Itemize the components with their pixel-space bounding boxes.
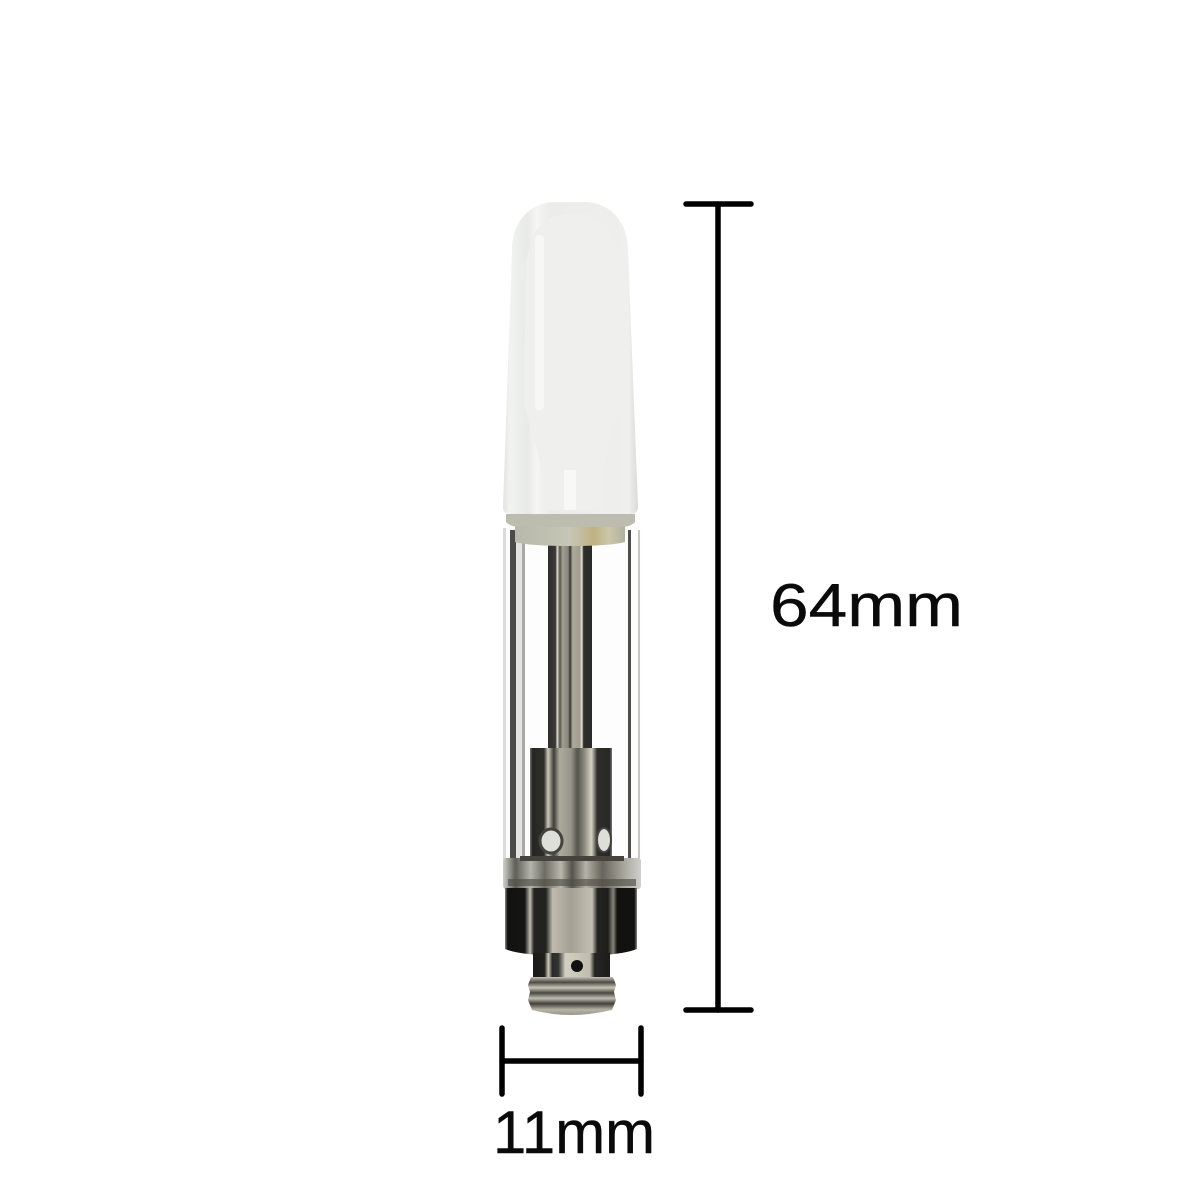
neck with vent hole (533, 953, 610, 983)
sealing ring (506, 514, 635, 546)
center tube (548, 545, 592, 750)
cartridge product image (503, 202, 641, 1015)
base band (503, 856, 641, 889)
thread (528, 977, 616, 1015)
height dimension bracket (686, 204, 751, 1010)
glass tank (503, 528, 641, 862)
white mouthpiece (503, 202, 638, 514)
lower sleeve (530, 748, 612, 860)
width dimension bracket (502, 1028, 641, 1094)
height label: 64mm (770, 572, 963, 639)
metal collar (505, 888, 637, 956)
width label: 11mm (493, 1099, 655, 1166)
